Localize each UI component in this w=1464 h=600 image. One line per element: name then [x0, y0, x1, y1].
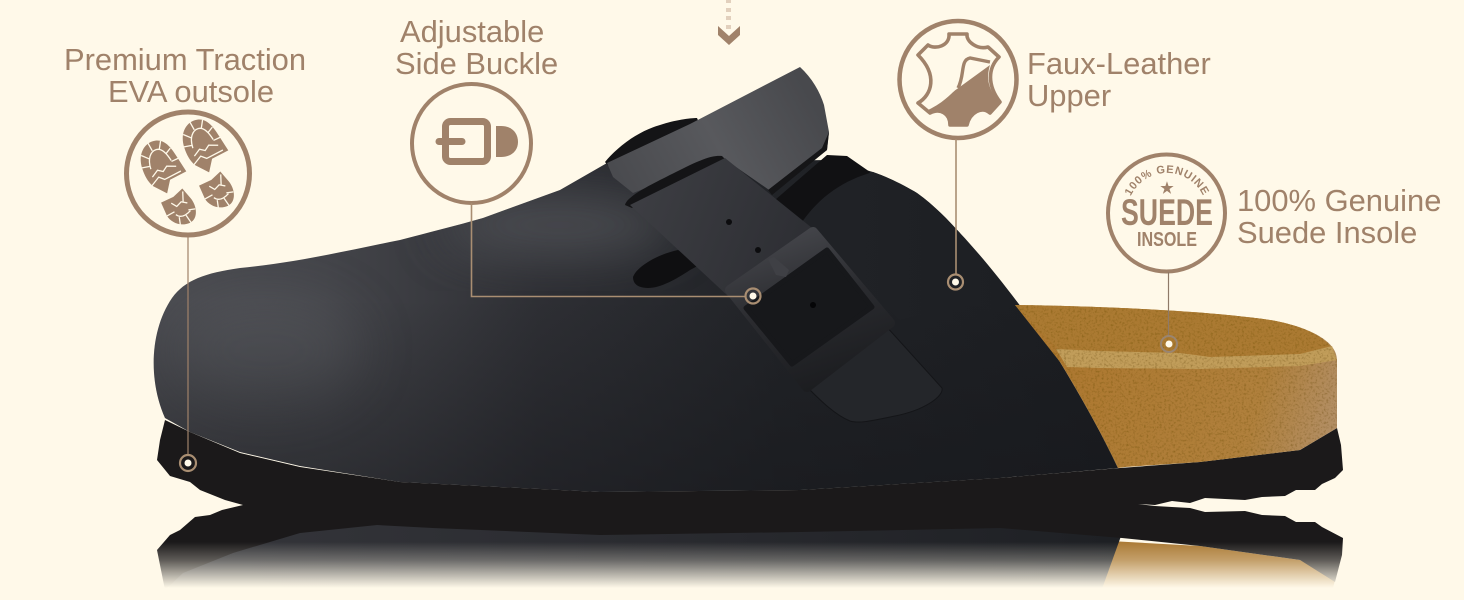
heading: Adjustable: [400, 14, 544, 49]
product: black clog with reflection: [140, 67, 1360, 600]
heading: Upper: [1027, 78, 1111, 113]
buckle: black metal frame: [730, 232, 890, 387]
reflection: mirrored upper and cork: [165, 515, 1335, 600]
strap: upper section with holes: [630, 158, 812, 296]
callout: adjustable side buckle: [395, 14, 760, 304]
heel opening: dark inner collar: [775, 155, 870, 225]
heel counter: upper panel edge: [800, 172, 985, 320]
icon: shoe prints: [126, 112, 250, 235]
leader line: [1161, 272, 1177, 352]
cork footbed: [1015, 305, 1337, 468]
sole: black outsole joined with reflection: [157, 420, 1343, 590]
leader line: [180, 236, 196, 471]
callout: premium traction EVA outsole: [64, 42, 306, 471]
leader line: [948, 139, 963, 290]
icon: suede stamp: INSOLE: [1137, 229, 1197, 251]
heading: 100% Genuine: [1237, 183, 1441, 218]
arrow: dotted down arrow: [718, 0, 740, 45]
heading: Side Buckle: [395, 46, 558, 81]
icon: suede stamp: SUEDE: [1121, 192, 1213, 233]
callout: faux-leather upper: [900, 21, 1211, 290]
flap edge shadow: [768, 132, 829, 195]
strap slot rim: [625, 156, 728, 208]
icon: suede stamp: ★: [1160, 180, 1174, 197]
shading: toe highlight and shadows: [140, 195, 1140, 500]
heading: Faux-Leather: [1027, 46, 1211, 81]
icon: buckle: [412, 84, 531, 203]
leader line: [472, 203, 760, 304]
flap: upper tongue: [607, 67, 829, 193]
icon: leather hide: [900, 21, 1016, 138]
callout: suede insole: [1106, 152, 1441, 353]
heading: EVA outsole: [108, 74, 274, 109]
top slot: [605, 118, 703, 180]
heading: Suede Insole: [1237, 215, 1417, 250]
icon: suede stamp: [1106, 152, 1227, 274]
heading: Premium Traction: [64, 42, 306, 77]
strap: lower tail: [808, 325, 942, 422]
lower slot: [633, 250, 705, 288]
upper: shoe body: [154, 160, 1118, 492]
icon: suede stamp: 100% GENUINE: [1125, 165, 1210, 196]
reflection fade: [140, 540, 1360, 600]
